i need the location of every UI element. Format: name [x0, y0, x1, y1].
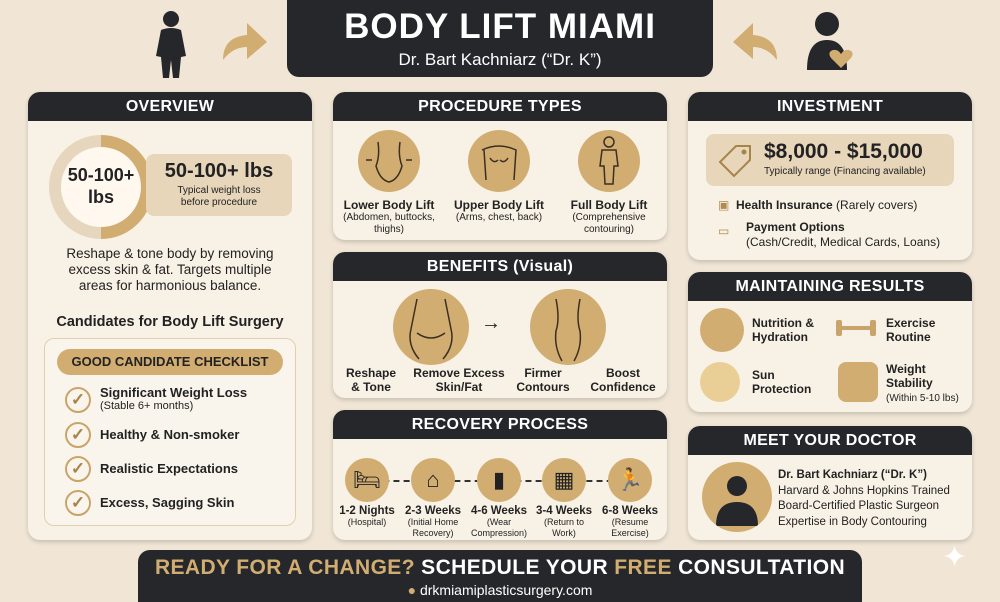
panel: maintaining results: Routine — [886, 330, 931, 344]
panel: maintaining results: Exercise — [886, 316, 935, 330]
price box: $8,000 - $15,000 — [764, 140, 923, 163]
panel: meet your doctor: MEET YOUR DOCTOR — [743, 432, 917, 449]
panel: recovery process — [333, 410, 667, 540]
panel: maintaining results: Sun — [752, 368, 775, 382]
timeline: ⌂ — [426, 467, 440, 492]
panel: benefits: Boost — [606, 366, 640, 380]
title block — [287, 0, 713, 77]
footer CTA: ● drkmiamiplasticsurgery.com — [408, 582, 592, 598]
panel: maintaining results: Nutrition & — [752, 316, 814, 330]
stat callout: Typical weight loss — [177, 185, 261, 196]
panel: benefits: Reshape — [346, 366, 396, 380]
timeline: ▮ — [493, 467, 505, 492]
stat callout: before procedure — [181, 197, 257, 208]
timeline: 2-3 Weeks — [405, 505, 461, 517]
title block: BODY LIFT MIAMI — [344, 7, 656, 46]
item: upper body lift: Upper Body Lift — [454, 198, 544, 212]
item: lower body lift: thighs) — [374, 224, 404, 235]
insurance row: ▣ Health Insurance (Rarely covers) — [718, 198, 917, 212]
panel: recovery process: RECOVERY PROCESS — [412, 416, 588, 433]
panel: maintaining results: Weight — [886, 362, 926, 376]
sparkle: ✦ — [942, 541, 967, 574]
price box: Typically range (Financing available) — [764, 166, 926, 177]
timeline: (Hospital) — [348, 517, 386, 527]
payment row: Payment Options — [746, 220, 845, 234]
item: full body lift — [571, 130, 648, 235]
overview text — [66, 246, 274, 293]
checklist box: ✓ — [71, 425, 85, 444]
icon: person with heart — [807, 12, 853, 70]
timeline: (Wear Compression) — [471, 517, 527, 538]
checklist box: GOOD CANDIDATE CHECKLIST — [72, 354, 268, 369]
doctor text: Board-Certified Plastic Surgeon — [778, 500, 939, 512]
panel: procedure types: PROCEDURE TYPES — [418, 98, 582, 115]
item: full body lift: (Comprehensive — [572, 212, 646, 223]
timeline: (Initial Home Recovery) — [408, 517, 458, 538]
checklist box: (Stable 6+ months) — [100, 400, 193, 412]
ring stat: 50-100+ — [68, 165, 134, 185]
panel: procedure types — [333, 92, 667, 240]
checklist box: ✓ — [71, 459, 85, 478]
panel: benefits — [333, 252, 667, 398]
timeline: 🛏 — [353, 467, 381, 492]
panel: overview: OVERVIEW — [126, 98, 214, 115]
item: full body lift: contouring) — [584, 224, 634, 235]
arrow: gold left — [733, 23, 777, 60]
footer CTA — [138, 550, 862, 602]
candidates heading: Candidates for Body Lift Surgery — [56, 314, 284, 330]
panel: maintaining results: MAINTAINING RESULTS — [735, 278, 925, 295]
timeline: ▦ — [554, 467, 574, 492]
timeline: (Resume Exercise) — [611, 517, 649, 538]
checklist box: Significant Weight Loss — [100, 385, 247, 400]
icon: person silhouette left — [156, 11, 186, 78]
item: lower body lift — [343, 130, 435, 235]
doctor text: Expertise in Body Contouring — [778, 516, 927, 528]
item: upper body lift: (Arms, chest, back) — [456, 212, 542, 223]
doctor text: Harvard & Johns Hopkins Trained — [778, 484, 950, 496]
panel: maintaining results: Hydration — [752, 330, 808, 344]
payment row: (Cash/Credit, Medical Cards, Loans) — [746, 235, 940, 249]
stat callout: 50-100+ lbs — [165, 160, 273, 182]
payment row — [718, 220, 940, 249]
panel: maintaining results: Protection — [752, 382, 811, 396]
payment row: ▭ — [718, 224, 729, 238]
timeline: 1-2 Nights — [339, 505, 395, 517]
arrow: → — [481, 312, 501, 334]
checklist box: ✓ — [71, 390, 85, 409]
panel: overview — [28, 92, 312, 540]
overview text: Reshape & tone body by removing — [66, 246, 274, 261]
doctor text — [778, 469, 950, 528]
panel: benefits: Remove Excess — [413, 366, 505, 380]
panel: investment — [688, 92, 972, 260]
panel: maintaining results — [688, 272, 972, 412]
stat callout — [146, 154, 292, 216]
timeline: 3-4 Weeks — [536, 505, 592, 517]
item: lower body lift: Lower Body Lift — [344, 198, 434, 212]
panel: benefits: Skin/Fat — [436, 380, 482, 394]
after figure — [530, 289, 606, 365]
checklist box: Excess, Sagging Skin — [100, 495, 234, 510]
ring stat — [49, 135, 147, 239]
doctor text: Dr. Bart Kachniarz (“Dr. K”) — [778, 469, 927, 481]
timeline: 🏃 — [616, 467, 644, 492]
title block: Dr. Bart Kachniarz (“Dr. K”) — [398, 50, 602, 69]
arrow: gold right — [223, 23, 267, 60]
panel: benefits: Confidence — [590, 380, 656, 394]
before figure — [393, 289, 469, 365]
doctor icon — [702, 462, 772, 532]
panel: investment: INVESTMENT — [777, 98, 883, 115]
timeline: 6-8 Weeks — [602, 505, 658, 517]
item: full body lift: Full Body Lift — [571, 198, 647, 212]
checklist box: Healthy & Non-smoker — [100, 427, 239, 442]
benefit labels — [346, 366, 656, 394]
panel: benefits: Firmer — [524, 366, 562, 380]
checklist box: Realistic Expectations — [100, 461, 238, 476]
overview text: areas for harmonious balance. — [79, 278, 261, 293]
ring stat: lbs — [88, 187, 114, 207]
panel: benefits: & Tone — [351, 380, 391, 394]
panel: benefits: BENEFITS (Visual) — [427, 258, 573, 275]
checklist box — [44, 338, 296, 526]
checklist box: ✓ — [71, 493, 85, 512]
panel: maintaining results: (Within 5-10 lbs) — [886, 393, 959, 404]
timeline: 4-6 Weeks — [471, 505, 527, 517]
panel: maintaining results: Stability — [886, 376, 933, 390]
item: upper body lift — [454, 130, 544, 223]
panel: meet your doctor — [688, 426, 972, 540]
overview text: excess skin & fat. Targets multiple — [68, 262, 272, 277]
price box — [706, 134, 954, 186]
panel: benefits: Contours — [516, 380, 570, 394]
timeline — [339, 458, 658, 538]
item: lower body lift: (Abdomen, buttocks, — [343, 212, 435, 223]
timeline: (Return to Work) — [544, 517, 584, 538]
footer CTA: READY FOR A CHANGE? SCHEDULE YOUR FREE CONSULTATION — [155, 556, 845, 579]
